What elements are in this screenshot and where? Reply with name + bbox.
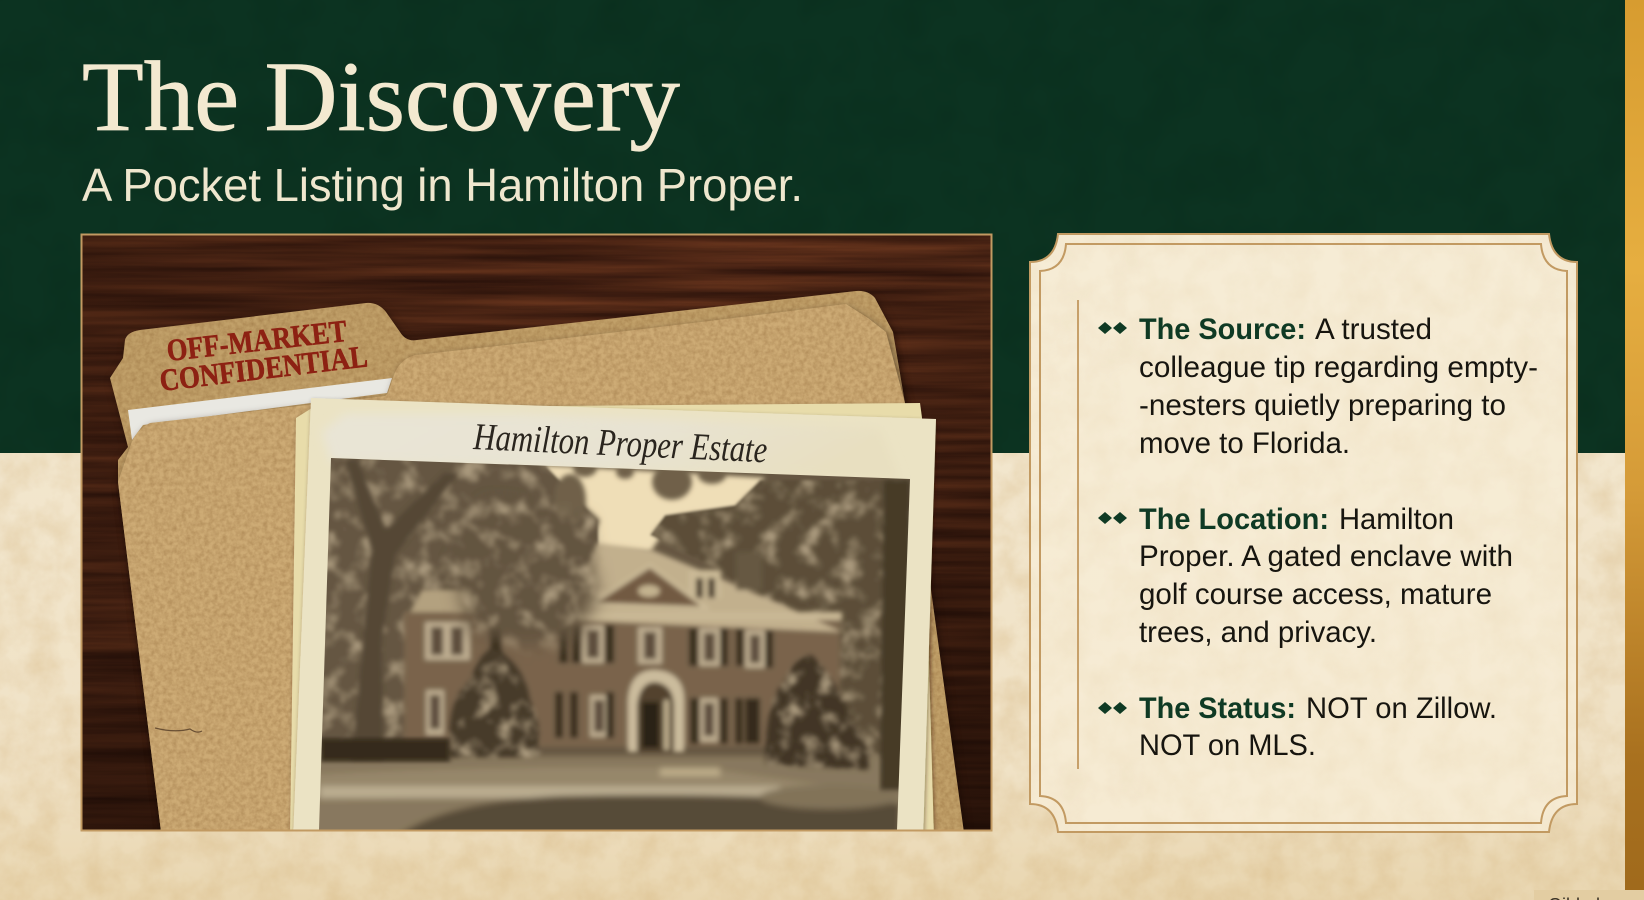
card outer frame [1030,234,1577,832]
icon: double diamond bullet [1098,702,1127,714]
gable [600,568,699,608]
item: The Source: colleague tip regarding empty- [1139,351,1538,384]
stamp: off-market confidential: CONFIDENTIAL [158,338,369,398]
item: The Source: -nesters quietly preparing to [1139,389,1506,422]
roof [570,543,842,632]
item: The Location: Hamilton [1339,503,1454,536]
cornice [798,608,846,624]
icon: double diamond bullet [1098,512,1127,524]
manila folder back [110,291,965,840]
photo print [293,398,936,840]
brick body [404,612,840,747]
item: The Source: A trusted [1315,313,1432,346]
item: The Location: The Location: [1139,503,1329,536]
background: dark green upper band [0,0,1625,453]
item: The Location [1098,503,1513,649]
item: The Status: NOT on Zillow. [1306,692,1497,725]
item: The Source: move to Florida. [1139,427,1350,460]
photo frame border [82,234,992,830]
white sheet in folder [128,378,392,440]
foreground foliage over house [449,510,608,651]
wood desk background [81,234,992,831]
dormer [689,570,721,598]
ground and driveway [319,754,898,830]
back papers behind photo [290,403,934,840]
trees and shrubs [320,460,910,790]
item: The Status [1098,692,1497,762]
background foliage [322,458,885,758]
subtitle: A Pocket Listing in Hamilton Proper. [82,159,803,211]
caption: Hamilton Proper Estate: Hamilton Proper Estate [472,416,768,471]
panel: details card [1030,234,1577,832]
fold tear lines [155,728,202,732]
background: cream parchment lower band [0,453,1625,900]
item: The Status: The Status: [1139,692,1296,725]
vertical rule [1077,300,1079,769]
house [404,543,842,752]
card inner frame [1040,244,1567,823]
stamp: off-market confidential [160,320,368,390]
sky gap [540,465,765,552]
item: The Status: NOT on MLS. [1139,729,1316,762]
chimney [736,552,762,590]
title: The Discovery [82,41,680,152]
bottom-right watermark tab [1534,890,1644,900]
icon: double diamond bullet [1098,322,1127,334]
item: The Location: golf course access, mature [1139,578,1492,611]
item: The Source [1098,313,1538,460]
stamp: off-market confidential: OFF-MARKET [165,313,349,368]
upper windows [490,625,773,668]
item: The Source: The Source: [1139,313,1306,346]
gold edge strip [1625,0,1644,890]
lower shutters [555,692,760,744]
manila folder front pocket [118,304,912,840]
panel: folder photo illustration [81,234,992,840]
entry arch and door [628,670,684,752]
sepia house photo [310,450,920,838]
item: The Location: Proper. A gated enclave with [1139,540,1513,573]
item: The Location: trees, and privacy. [1139,616,1377,649]
